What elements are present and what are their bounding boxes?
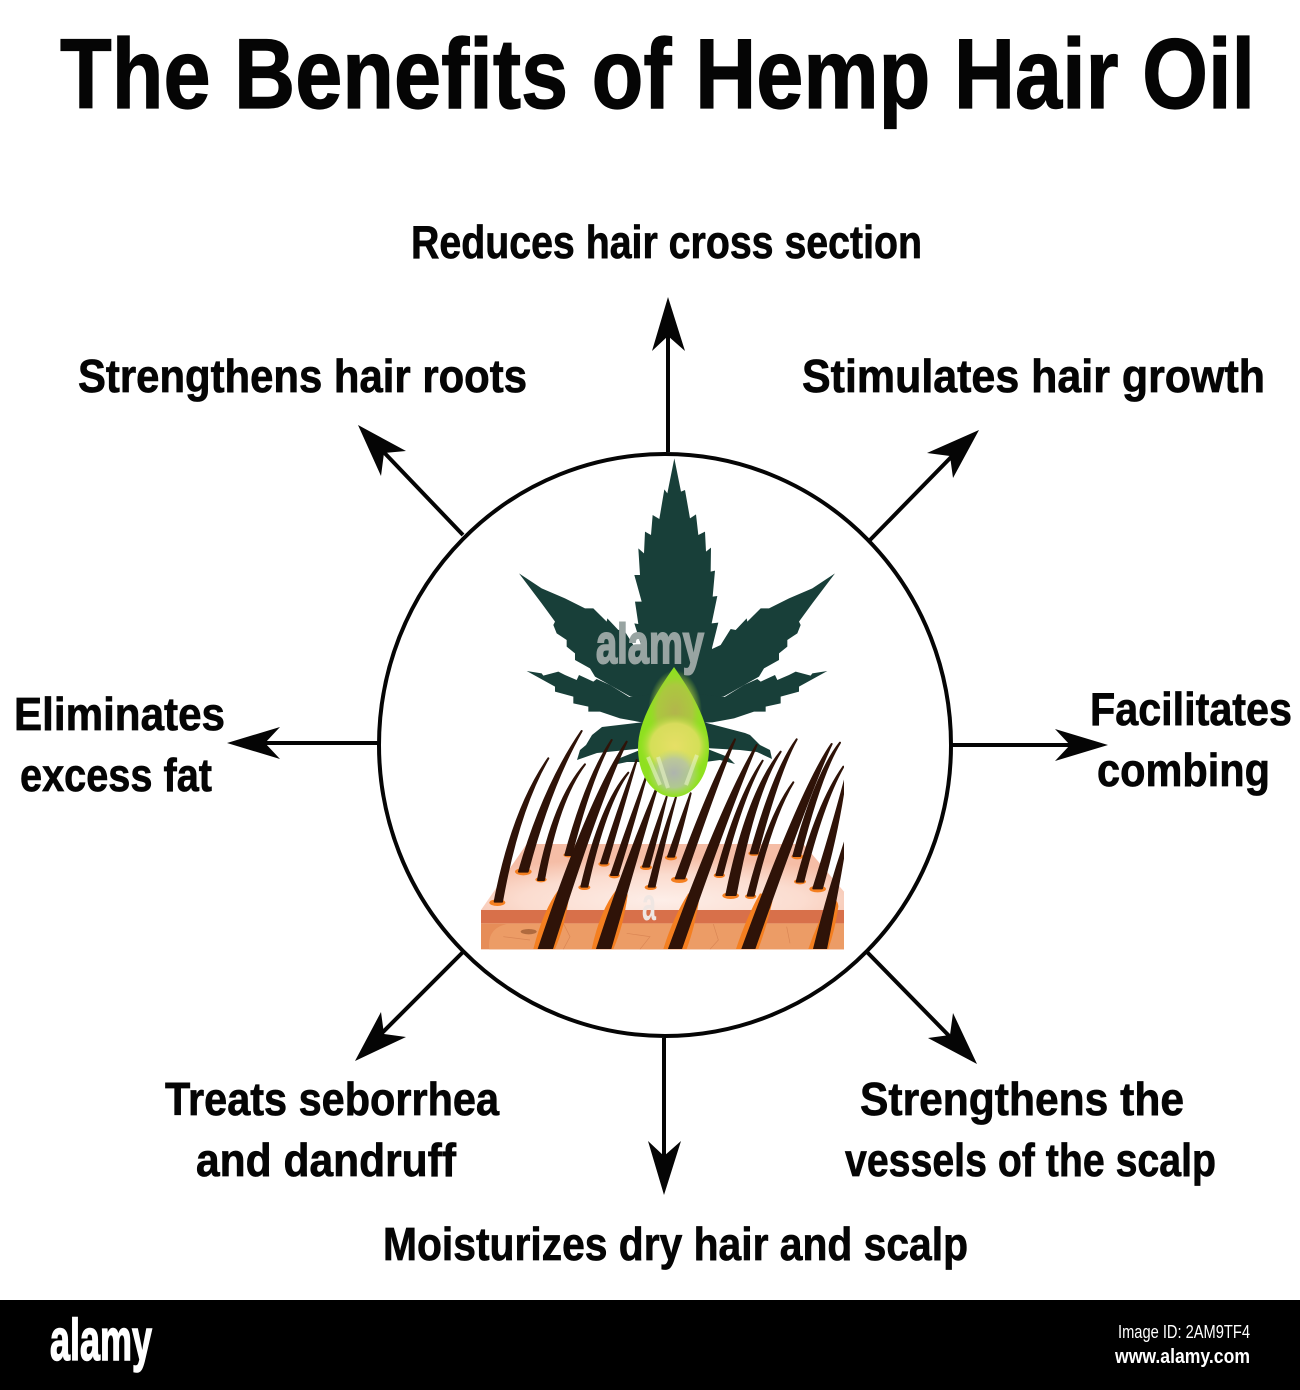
icon: hemp leaf xyxy=(519,458,835,765)
label: strengthens the vessels of the scalp xyxy=(845,1073,1216,1186)
label: reduces hair cross section: Reduces hair cross section xyxy=(411,216,922,268)
left group of follicles and hair xyxy=(489,731,676,950)
label: treats seborrhea and dandruff: Treats seborrhea xyxy=(165,1073,499,1125)
watermark: center: alamy xyxy=(596,612,704,675)
label: treats seborrhea and dandruff: and dandruff xyxy=(196,1134,457,1186)
arrow: lower left xyxy=(355,952,463,1061)
label: strengthens hair roots: Strengthens hair roots xyxy=(78,350,527,402)
label: strengthens the vessels of the scalp: vessels of the scalp xyxy=(845,1134,1216,1186)
arrow: up xyxy=(652,297,685,452)
hair follicles and strands xyxy=(489,731,847,950)
label: moisturizes dry hair and scalp: Moisturizes dry hair and scalp xyxy=(383,1218,968,1270)
label: stimulates hair growth: Stimulates hair growth xyxy=(802,350,1265,402)
arrow: upper right xyxy=(870,430,979,540)
skin: side band xyxy=(481,910,844,923)
label: eliminates excess fat: excess fat xyxy=(20,749,212,801)
arrow: left xyxy=(227,727,378,759)
arrow: upper left xyxy=(358,425,463,535)
arrow: down xyxy=(648,1038,681,1195)
arrow: lower right xyxy=(867,952,977,1064)
label: facilitates combing: combing xyxy=(1097,744,1270,796)
arrow: right xyxy=(952,729,1108,761)
label: strengthens the vessels of the scalp: Strengthens the xyxy=(860,1073,1184,1125)
label: eliminates excess fat xyxy=(14,688,225,801)
label: eliminates excess fat: Eliminates xyxy=(14,688,225,740)
leaf: top leaflet xyxy=(634,458,718,683)
footer image id: Image ID: 2AM9TF4 xyxy=(1118,1322,1250,1342)
label: treats seborrhea and dandruff xyxy=(165,1073,499,1186)
right group of follicles and hair xyxy=(663,739,847,949)
center circle xyxy=(379,454,951,1036)
leaf: small lower leaflets xyxy=(577,722,772,765)
icon: oil drop xyxy=(638,667,710,797)
footer url: www.alamy.com xyxy=(1114,1346,1250,1368)
footer bar xyxy=(0,1300,1300,1390)
footer logo: alamy xyxy=(50,1308,152,1373)
illustration: skin cross section xyxy=(481,844,844,949)
skin: lower layer xyxy=(481,923,844,949)
watermark: small letter: a xyxy=(642,878,656,930)
label: facilitates combing xyxy=(1090,683,1292,796)
leaf: right leaflets xyxy=(677,573,835,723)
leaf: left leaflets xyxy=(519,573,677,723)
skin: top surface xyxy=(481,844,844,910)
